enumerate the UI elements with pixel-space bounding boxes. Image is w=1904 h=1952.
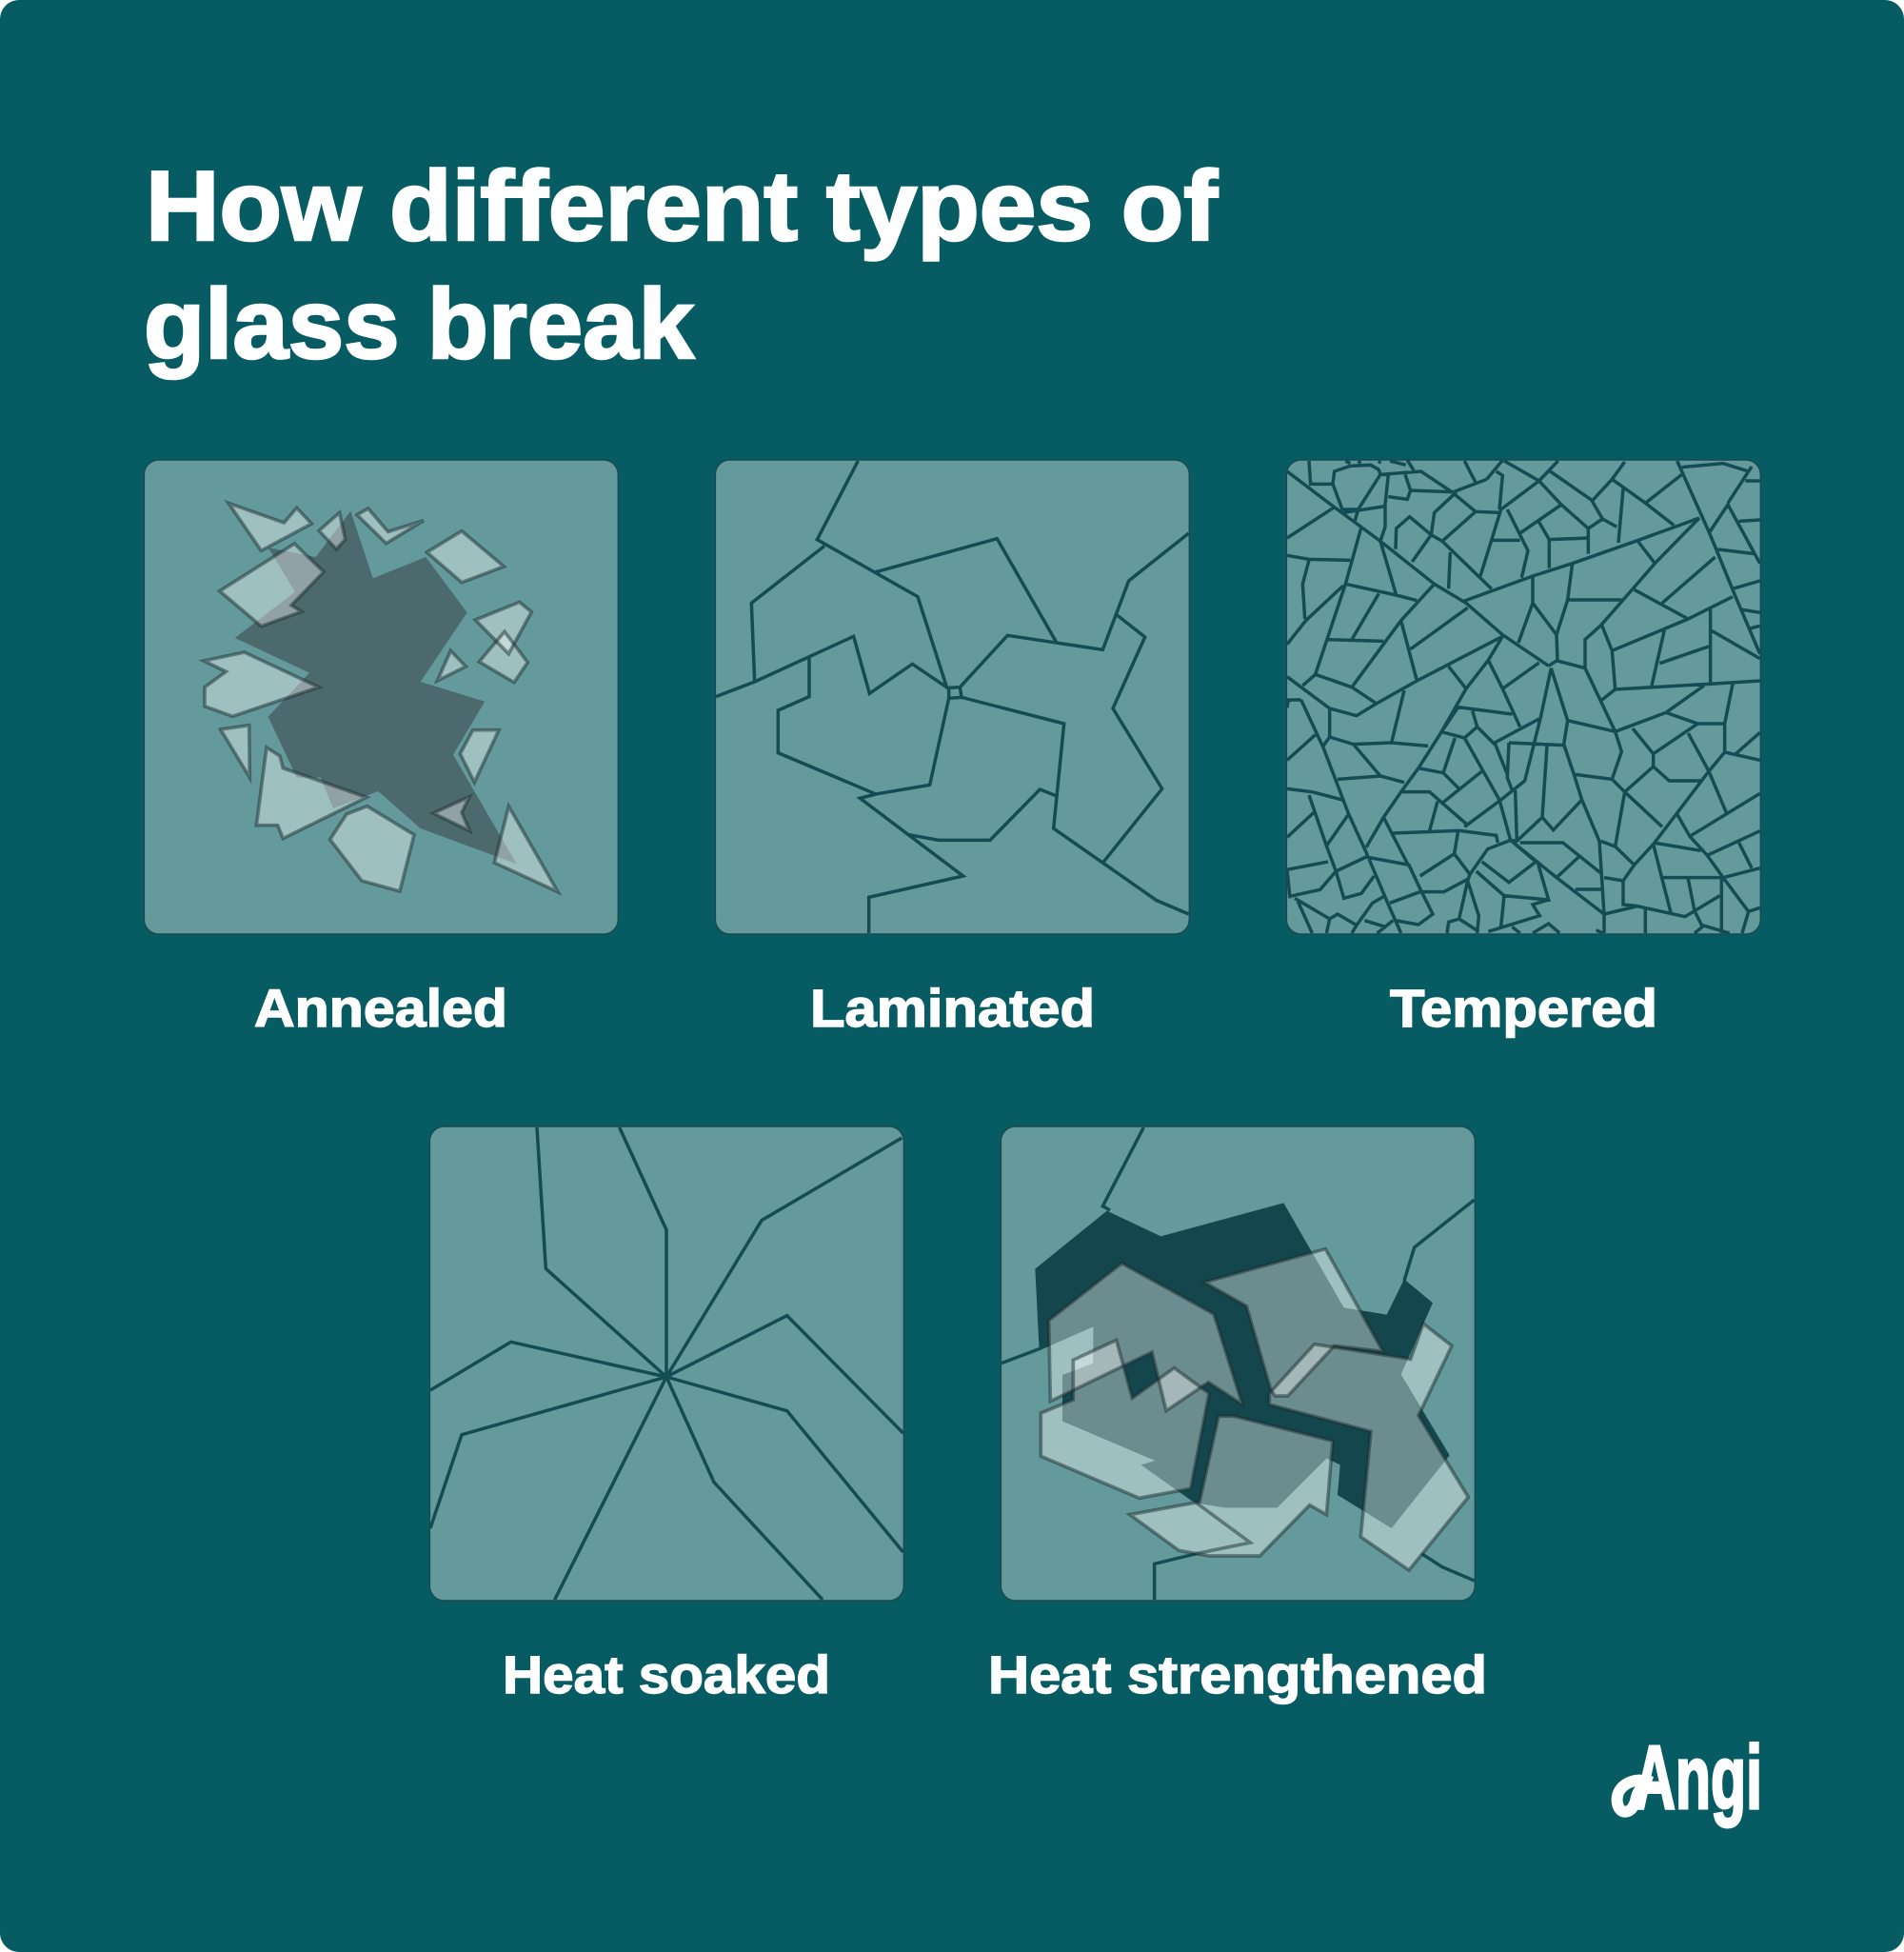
label: heat strengthened: Heat strengthened bbox=[988, 1644, 1487, 1704]
label: tempered: Tempered bbox=[1390, 978, 1657, 1038]
panel: annealed glass bbox=[144, 460, 618, 934]
title: glass break bbox=[144, 269, 694, 380]
displaced glass pieces bbox=[1041, 1249, 1468, 1570]
dark cavity bbox=[1035, 1203, 1450, 1528]
tempered crack mesh bbox=[1287, 460, 1760, 933]
outer cracks bbox=[1002, 1127, 1475, 1600]
label: annealed: Annealed bbox=[254, 978, 507, 1038]
panel: tempered glass bbox=[1286, 460, 1760, 934]
logo: Angi bbox=[1617, 1727, 1762, 1828]
logo: Angi: Angi bbox=[1634, 1727, 1762, 1828]
hole in annealed glass bbox=[235, 511, 517, 864]
laminated crack lines bbox=[716, 461, 1189, 933]
title: How different types of bbox=[146, 151, 1218, 262]
panel: heat strengthened glass bbox=[1001, 1126, 1475, 1601]
radial cracks bbox=[430, 1127, 903, 1600]
title bbox=[144, 151, 1218, 380]
shards bbox=[204, 503, 558, 892]
label: heat soaked: Heat soaked bbox=[503, 1644, 830, 1704]
label: laminated: Laminated bbox=[810, 978, 1095, 1038]
panel: laminated glass bbox=[715, 460, 1189, 934]
panel: heat soaked glass bbox=[429, 1126, 903, 1601]
